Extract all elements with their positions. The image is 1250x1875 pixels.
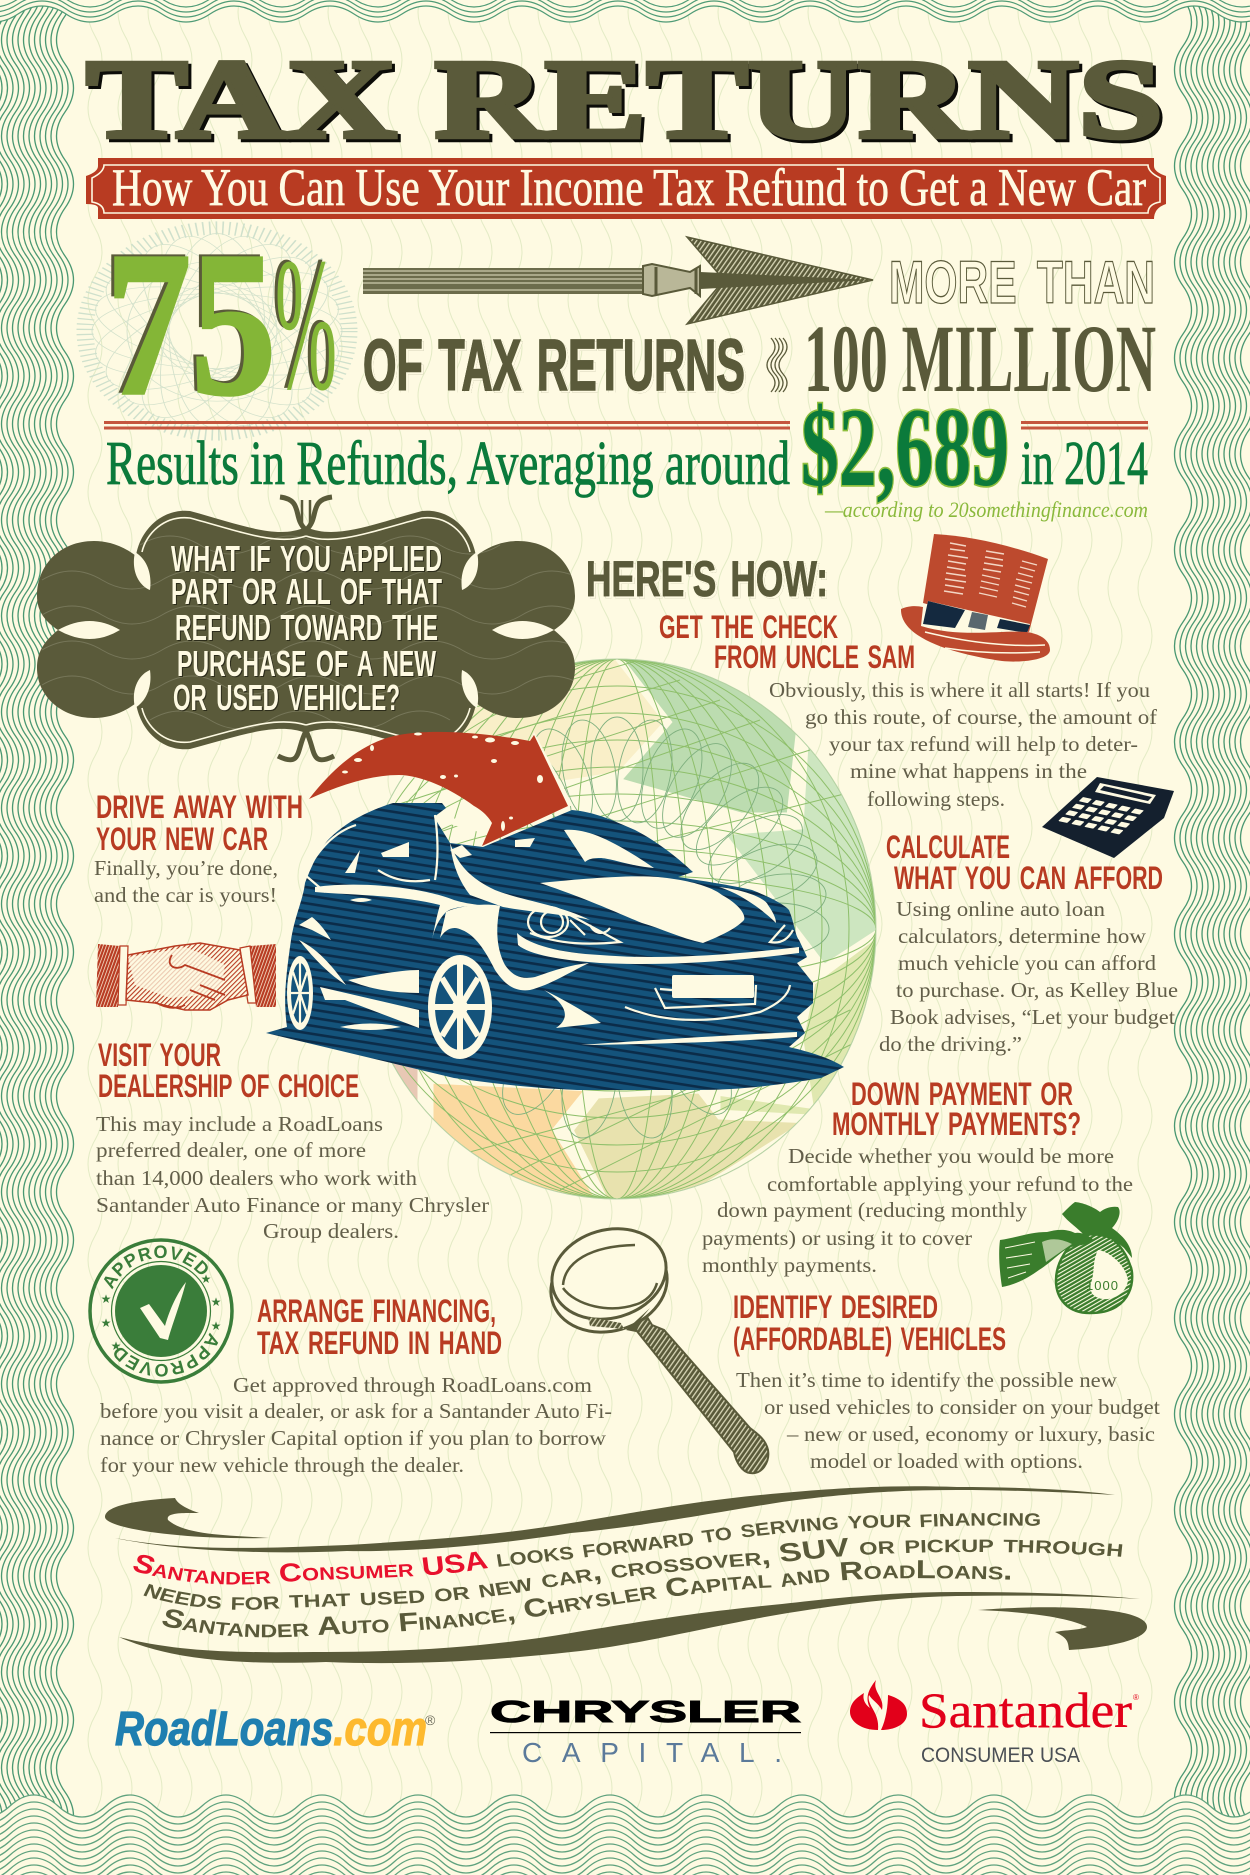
step: calculate what you can afford: to purchase. Or, as Kelley Blue: [896, 978, 1178, 1002]
ribbon text: [133, 1513, 1122, 1638]
step: drive away: and the car is yours!: [94, 883, 277, 907]
logo: chrysler capital: CAPITAL.: [522, 1737, 782, 1768]
stat: 75%: 75: [106, 209, 276, 438]
icon: money bag: [999, 1202, 1132, 1313]
step: down payment: payments) or using it to cover: [702, 1226, 972, 1250]
step: drive away: Finally, you’re done,: [94, 856, 278, 880]
squiggle divider: [767, 338, 787, 392]
step: down payment: MONTHLY PAYMENTS?: [832, 1106, 1081, 1142]
step: get the check: Obviously, this is where it all starts! If you: [769, 678, 1151, 702]
title: TAX RETURNS: [86, 37, 1163, 162]
step: drive away: DRIVE AWAY WITH: [96, 789, 303, 825]
results headline: Results in Refunds, Averaging around: [106, 430, 790, 498]
icon: approved stamp: ★: [211, 1319, 221, 1333]
logo: roadloans.com: RoadLoans.com: [115, 1703, 427, 1756]
step: down payment: Decide whether you would be more: [788, 1144, 1114, 1168]
step: calculate what you can afford: CALCULATE: [886, 829, 1010, 865]
step: calculate what you can afford: Book advises, “Let your budget: [890, 1005, 1175, 1029]
step: arrange financing: Get approved through RoadLoans.com: [233, 1373, 592, 1397]
step: arrange financing: before you visit a dealer, or ask for a Santander Auto Fi-: [100, 1399, 612, 1423]
stat: average refund: $2,689: [801, 386, 1009, 510]
step: down payment: monthly payments.: [702, 1253, 877, 1277]
step: visit dealership: [96, 1037, 489, 1243]
ribbon text: needs for that used or new car, crossover, SUV or pickup through: [144, 1538, 1122, 1610]
border: top guilloche: [0, 0, 1250, 22]
callout text: OR USED VEHICLE?: [173, 677, 400, 718]
icon: approved stamp: APPROVED: [114, 1332, 218, 1377]
source note: —according to 20somethingfinance.com: [824, 497, 1148, 522]
step: arrange financing: ARRANGE FINANCING,: [257, 1293, 496, 1329]
step: down payment: [702, 1076, 1133, 1277]
step: calculate what you can afford: do the driving.”: [879, 1032, 1022, 1056]
icon: approved stamp: APPROVED: [104, 1245, 208, 1290]
step: visit dealership: than 14,000 dealers who work with: [96, 1166, 418, 1190]
heading: here's how: HERE'S HOW:: [586, 551, 828, 607]
icon: approved stamp: [88, 1238, 234, 1384]
step: arrange financing: [100, 1293, 612, 1477]
step: calculate what you can afford: [879, 829, 1178, 1056]
step: visit dealership: DEALERSHIP OF CHOICE: [98, 1068, 359, 1104]
step: arrange financing: for your new vehicle through the dealer.: [100, 1453, 464, 1477]
border: left guilloche: [0, 0, 74, 1875]
results headline: [106, 386, 1148, 510]
icon: approved stamp: ★: [201, 1272, 211, 1286]
step: identify vehicles: or used vehicles to consider on your budget: [764, 1395, 1160, 1419]
step: visit dealership: Santander Auto Finance or many Chrysler: [96, 1193, 489, 1217]
callout text: WHAT IF YOU APPLIED: [171, 538, 442, 579]
icon: handshake: [96, 943, 276, 1010]
icon: approved stamp: ★: [111, 1339, 121, 1353]
logo: santander consumer usa: Santander: [919, 1682, 1132, 1738]
step: identify vehicles: Then it’s time to identify the possible new: [736, 1368, 1118, 1392]
icon: uncle sam hat: [901, 534, 1050, 662]
step: down payment: down payment (reducing monthly: [717, 1198, 1028, 1222]
step: identify vehicles: [733, 1289, 1160, 1473]
step: visit dealership: This may include a RoadLoans: [96, 1112, 383, 1136]
step: down payment: comfortable applying your refund to the: [767, 1172, 1133, 1196]
ribbon text: Santander Consumer USA looks forward to serving your financing: [133, 1513, 1040, 1584]
car wheels: [287, 955, 492, 1059]
border: right guilloche: [1174, 0, 1250, 1822]
step: identify vehicles: model or loaded with options.: [810, 1449, 1083, 1473]
step: calculate what you can afford: calculators, determine how: [898, 924, 1147, 948]
stat label: of tax returns: OF TAX RETURNS: [363, 326, 745, 406]
step: identify vehicles: – new or used, economy or luxury, basic: [786, 1422, 1155, 1446]
logo: santander consumer usa: [850, 1680, 1139, 1767]
step: calculate what you can afford: much vehicle you can afford: [898, 951, 1157, 975]
border: bottom guilloche: [0, 1795, 1250, 1875]
callout plaque: [37, 497, 582, 760]
step: visit dealership: VISIT YOUR: [98, 1037, 221, 1073]
step: get the check: your tax refund will help to deter-: [829, 732, 1138, 756]
step: get the check: GET THE CHECK: [659, 609, 838, 645]
callout text: PURCHASE OF A NEW: [177, 643, 436, 684]
step: identify vehicles: (AFFORDABLE) VEHICLES: [733, 1321, 1006, 1357]
step: get the check: following steps.: [867, 787, 1005, 811]
step: get the check: FROM UNCLE SAM: [714, 639, 915, 675]
step: get the check: mine what happens in the: [850, 759, 1087, 783]
step: get the check: [659, 609, 1157, 811]
callout text: REFUND TOWARD THE: [175, 607, 438, 648]
illustration: car: [266, 803, 844, 1090]
logo: santander consumer usa: ®: [1133, 1693, 1139, 1702]
arrow: ornate engraved: [363, 237, 873, 324]
step: visit dealership: Group dealers.: [263, 1219, 399, 1243]
logo: roadloans.com: ®: [425, 1712, 436, 1728]
ribbon text: Santander Auto Finance, Chrysler Capital and RoadLoans.: [162, 1560, 1010, 1638]
illustration: guilloche globe: [386, 658, 876, 1200]
text: %: [275, 220, 337, 430]
icon: magnifying glass: [540, 1216, 768, 1473]
callout text: PART OR ALL OF THAT: [171, 571, 442, 612]
step: visit dealership: preferred dealer, one of more: [96, 1138, 366, 1162]
logo: chrysler capital: CHRYSLER: [490, 1694, 801, 1729]
step: drive away: YOUR NEW CAR: [96, 821, 268, 857]
step: arrange financing: TAX REFUND IN HAND: [257, 1325, 502, 1361]
icon: approved stamp: ★: [101, 1316, 111, 1330]
ribbon banner: [105, 1486, 1147, 1664]
step: calculate what you can afford: Using online auto loan: [896, 897, 1106, 921]
icon: approved stamp: ★: [211, 1295, 221, 1309]
step: down payment: DOWN PAYMENT OR: [851, 1076, 1073, 1112]
icon: calculator: [1042, 777, 1174, 858]
step: get the check: go this route, of course, the amount of: [805, 705, 1157, 729]
icon: money bag: 1000: [1086, 1278, 1119, 1293]
step: identify vehicles: IDENTIFY DESIRED: [733, 1289, 938, 1325]
icon: approved stamp: ★: [101, 1292, 111, 1306]
callout text: [171, 538, 442, 718]
rosette behind 75%: [84, 227, 350, 435]
logo: santander consumer usa: CONSUMER USA: [921, 1744, 1080, 1767]
arrow: distressed red: [309, 732, 573, 846]
logo: chrysler capital: [490, 1694, 801, 1768]
step: arrange financing: nance or Chrysler Capital option if you plan to borrow: [100, 1426, 607, 1450]
step: drive away: [94, 789, 303, 907]
results headline: in 2014: [1021, 430, 1148, 498]
